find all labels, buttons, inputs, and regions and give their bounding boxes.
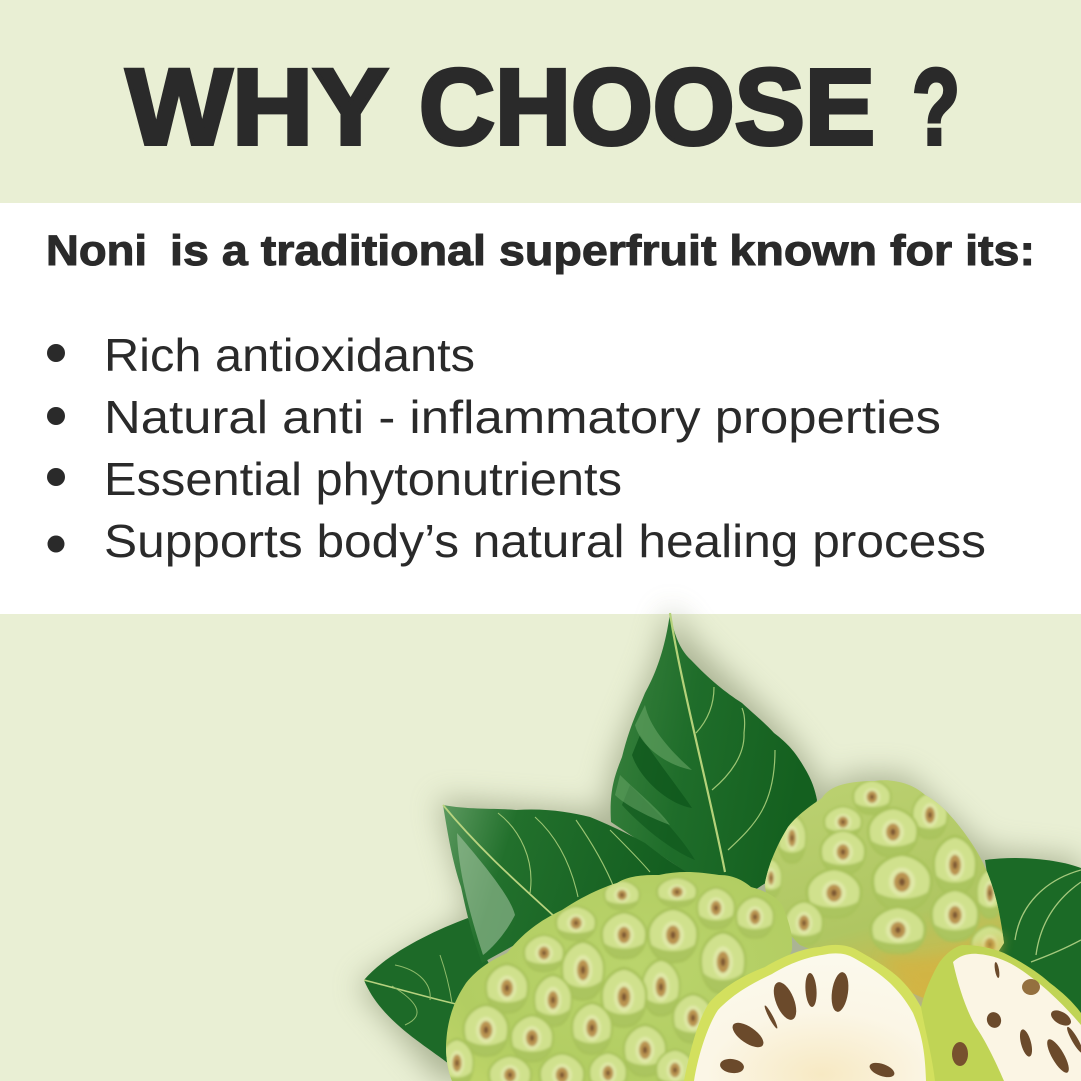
- leaf: top centre: [611, 613, 817, 900]
- benefits list: [47, 329, 986, 567]
- subheading: is a traditional superfruit known for its:: [170, 227, 1035, 275]
- leaf: bottom left: [364, 918, 510, 1064]
- fruit cells: [760, 780, 1009, 965]
- seeds: [719, 971, 896, 1080]
- bullet item: anti-inflammatory: Natural anti - inflammatory properties: [104, 391, 941, 443]
- fruit: whole right: [760, 780, 1009, 1010]
- bullet item: rich antioxidants: Rich antioxidants: [104, 329, 475, 381]
- title: CHOOSE: [419, 46, 875, 167]
- bottom band: [0, 614, 1081, 1081]
- fruit: whole left: [441, 872, 792, 1081]
- title band: [0, 0, 1081, 203]
- leaf: right: [985, 858, 1081, 1045]
- noni illustration: [358, 605, 1081, 1081]
- leaf: left: [443, 805, 690, 963]
- bullet item: healing process: Supports body’s natural healing process: [104, 515, 986, 567]
- title: [126, 46, 960, 167]
- title: ?: [912, 46, 960, 167]
- bullet item: phytonutrients: Essential phytonutrients: [104, 453, 622, 505]
- title: WHY: [126, 46, 388, 167]
- fruit cells: [441, 878, 774, 1081]
- subheading: Noni: [46, 227, 147, 275]
- seeds: [985, 962, 1081, 1075]
- fruit: cut right: [921, 945, 1081, 1081]
- soft shadow: [358, 605, 1081, 1081]
- fruit: cut centre: [684, 945, 935, 1081]
